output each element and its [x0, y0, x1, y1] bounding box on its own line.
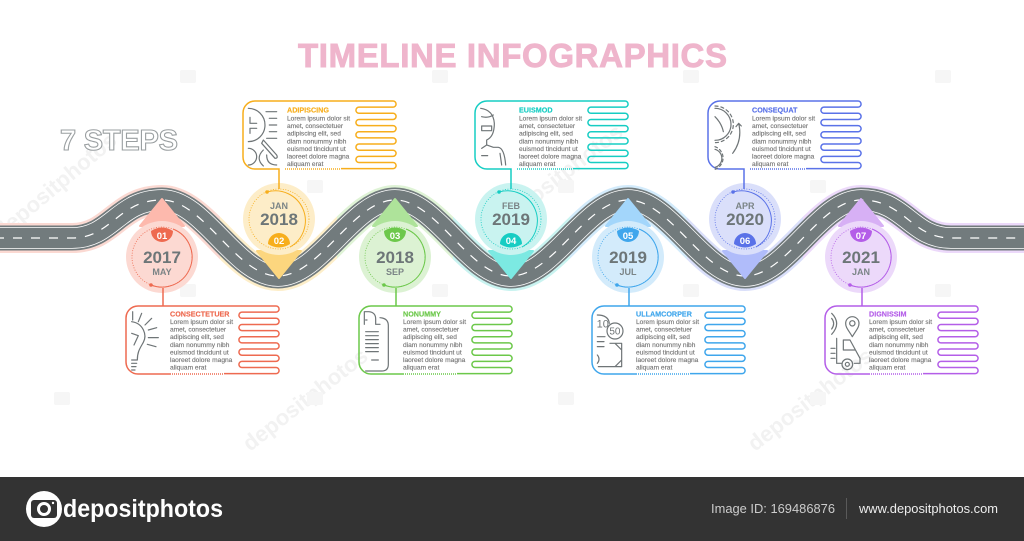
panel: step 1 card: aliquam erat — [170, 365, 206, 372]
panel: step 7 card: adipiscing elit, sed — [869, 334, 923, 341]
panel: step 3 card: diam nonummy nibh — [403, 342, 463, 349]
icon: depositphotos logo — [26, 491, 62, 527]
panel: step 5 card: amet, consectetuer — [636, 327, 693, 334]
panel: step 4 card: diam nonummy nibh — [519, 138, 579, 145]
step 4 marker: FEB — [502, 201, 521, 211]
step 5 marker — [592, 199, 664, 293]
panel: step 5 card — [592, 288, 745, 374]
step 3 marker — [359, 199, 431, 293]
title: TIMELINE INFOGRAPHICS — [298, 37, 727, 74]
panel: step 2 card: Lorem ipsum dolor sit — [287, 116, 350, 122]
icon: delivery truck and pin — [831, 313, 860, 370]
panel: step 2 card: laoreet dolore magna — [287, 154, 350, 160]
icon: person — [481, 108, 506, 165]
footer band: www.depositphotos.com — [858, 502, 998, 516]
panel: step 5 card: Lorem ipsum dolor sit — [636, 319, 699, 326]
panel: step 4 card: euismod tincidunt ut — [519, 146, 578, 153]
step 3 marker: SEP — [386, 267, 404, 277]
panel: step 7 card: euismod tincidunt ut — [869, 349, 928, 356]
panel: step 3 card: amet, consectetuer — [403, 327, 460, 334]
panel: step 3 card: Lorem ipsum dolor sit — [403, 319, 466, 326]
panel: step 7 card — [825, 288, 978, 374]
step 1 marker: 01 — [157, 231, 168, 242]
panel: step 3 card: euismod tincidunt ut — [403, 349, 462, 356]
panel: step 2 card: amet, consectetuer — [287, 123, 344, 130]
watermark — [0, 70, 951, 456]
panel: step 6 card: laoreet dolore magna — [752, 154, 815, 160]
step 2 marker: 2018 — [260, 210, 298, 229]
panel: step 7 card: aliquam erat — [869, 365, 905, 372]
step 5 marker: 05 — [623, 231, 634, 242]
icon: money: 10 — [597, 318, 609, 330]
panel: step 2 card — [243, 101, 396, 189]
panel: step 2 card: diam nonummy nibh — [287, 138, 347, 145]
panel: step 5 card: adipiscing elit, sed — [636, 334, 690, 341]
panel: step 1 card: euismod tincidunt ut — [170, 349, 229, 356]
panel: step 1 card — [126, 288, 279, 374]
watermark: depositphotos — [743, 343, 877, 456]
step 1 marker — [126, 199, 198, 293]
panel: step 2 card: aliquam erat — [287, 161, 323, 168]
heading: 7 steps: 7 STEPS — [60, 125, 178, 157]
step 5 marker: JUL — [619, 267, 637, 277]
step 6 marker: 06 — [740, 236, 750, 247]
icon: anatomy magnifier — [248, 108, 277, 166]
panel: step 2 card: euismod tincidunt ut — [287, 146, 346, 153]
panel: step 6 card: diam nonummy nibh — [752, 138, 812, 145]
panel: step 7 card: DIGNISSIM — [869, 310, 907, 318]
panel: step 6 card: aliquam erat — [752, 161, 788, 168]
panel: step 5 card: laoreet dolore magna — [636, 357, 699, 364]
watermark: depositphotos — [238, 343, 372, 456]
step 6 marker: 2020 — [726, 210, 764, 229]
panel: step 1 card: diam nonummy nibh — [170, 342, 230, 349]
panel: step 6 card: adipiscing elit, sed — [752, 131, 806, 138]
watermark: depositphotos — [493, 119, 627, 232]
panel: step 7 card: Lorem ipsum dolor sit — [869, 319, 932, 326]
panel: step 7 card: diam nonummy nibh — [869, 342, 929, 349]
road — [0, 200, 1024, 276]
step 2 marker — [243, 183, 315, 278]
panel: step 5 card: diam nonummy nibh — [636, 342, 696, 349]
panel: step 5 card: ULLAMCORPER — [636, 310, 693, 318]
panel: step 4 card: amet, consectetuer — [519, 123, 576, 130]
panel: step 7 card: amet, consectetuer — [869, 327, 926, 334]
footer band — [0, 477, 1024, 541]
panel: step 3 card: adipiscing elit, sed — [403, 334, 457, 341]
icon: money: 50 — [609, 327, 621, 338]
panel: step 6 card: euismod tincidunt ut — [752, 146, 811, 153]
panel: step 4 card: aliquam erat — [519, 161, 555, 168]
icon: light bulb — [132, 312, 158, 370]
panel: step 5 card: euismod tincidunt ut — [636, 349, 695, 356]
footer band: Image ID: 169486876 — [711, 502, 835, 516]
step 4 marker: 04 — [506, 236, 517, 247]
step 3 marker: 2018 — [376, 248, 414, 267]
panel: step 6 card: amet, consectetuer — [752, 123, 809, 130]
panel: step 6 card: CONSEQUAT — [752, 106, 798, 114]
panel: step 2 card: ADIPISCING — [287, 106, 329, 114]
panel: step 4 card: laoreet dolore magna — [519, 154, 582, 160]
panel: step 3 card: laoreet dolore magna — [403, 357, 466, 364]
icon: gears — [715, 106, 741, 169]
step 1 marker: 2017 — [143, 248, 181, 267]
panel: step 1 card: adipiscing elit, sed — [170, 334, 224, 341]
step 7 marker: 2021 — [842, 248, 880, 267]
panel: step 3 card: aliquam erat — [403, 365, 439, 372]
icon: document — [364, 312, 388, 371]
step 5 marker: 2019 — [609, 248, 647, 267]
step 4 marker: 2019 — [492, 210, 530, 229]
step 2 marker: 02 — [274, 236, 284, 247]
panel: step 3 card: NONUMMY — [403, 310, 441, 318]
step 1 marker: MAY — [152, 267, 172, 277]
panel: step 4 card: EUISMOD — [519, 106, 553, 114]
panel: step 3 card — [359, 288, 512, 374]
footer band: depositphotos — [63, 495, 223, 523]
panel: step 4 card — [475, 101, 628, 189]
step 3 marker: 03 — [390, 231, 400, 242]
step 6 marker: APR — [735, 201, 755, 211]
icon: money — [597, 315, 623, 367]
step 7 marker: 07 — [856, 231, 866, 242]
step 2 marker: JAN — [270, 201, 288, 211]
panel: step 1 card: amet, consectetuer — [170, 327, 227, 334]
panel: step 6 card: Lorem ipsum dolor sit — [752, 116, 815, 122]
panel: step 1 card: laoreet dolore magna — [170, 357, 233, 364]
step 4 marker — [475, 183, 547, 278]
panel: step 4 card: Lorem ipsum dolor sit — [519, 116, 582, 122]
panel: step 5 card: aliquam erat — [636, 365, 672, 372]
panel: step 2 card: adipiscing elit, sed — [287, 131, 341, 138]
panel: step 1 card: CONSECTETUER — [170, 310, 230, 318]
panel: step 1 card: Lorem ipsum dolor sit — [170, 319, 233, 326]
panel: step 7 card: laoreet dolore magna — [869, 357, 932, 364]
panel: step 4 card: adipiscing elit, sed — [519, 131, 573, 138]
step 6 marker — [709, 183, 781, 278]
panel: step 6 card — [708, 101, 861, 189]
step 7 marker — [825, 199, 897, 293]
step 7 marker: JAN — [852, 267, 870, 277]
